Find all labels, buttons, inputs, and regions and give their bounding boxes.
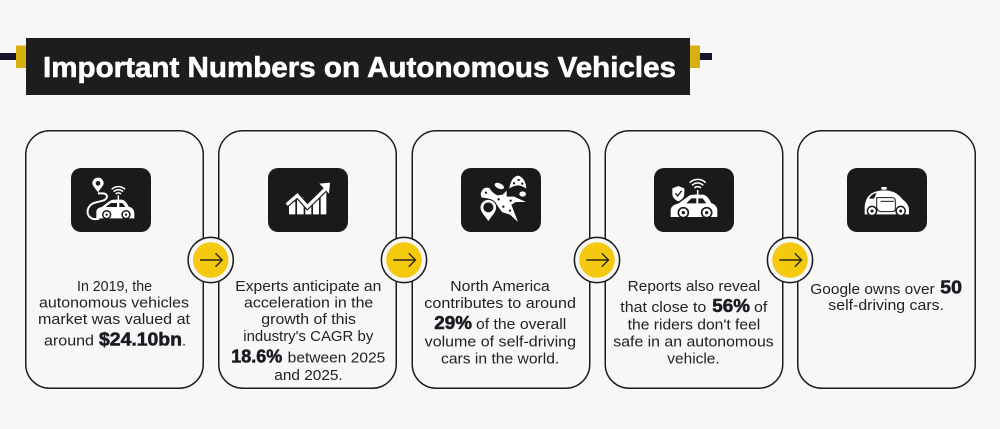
text: CAGR growth: and 2025. <box>274 368 343 384</box>
text: market value: market was valued at <box>38 312 190 328</box>
panel: Google fleet <box>798 131 975 388</box>
panel: CAGR growth <box>219 131 396 388</box>
text: CAGR growth <box>231 279 385 384</box>
title text: Important Numbers on Autonomous Vehicles <box>43 52 676 84</box>
arrow connector 1 <box>188 237 233 283</box>
arrow connector 3 <box>574 237 620 283</box>
text: North America share: cars in the world. <box>441 351 559 367</box>
text: CAGR growth: 18.6% <box>231 347 282 367</box>
text: rider safety <box>613 279 774 367</box>
text: North America share: of the overall <box>476 317 566 333</box>
icon: car with shield and signal <box>654 168 734 232</box>
arrow connector 2 <box>381 237 427 283</box>
text: rider safety: Reports also reveal <box>628 279 760 295</box>
text: CAGR growth: Experts anticipate an <box>235 279 381 295</box>
panel: market value <box>26 131 203 388</box>
text: market value: In 2019, the <box>77 279 152 295</box>
icon: connected car with location pin <box>71 168 151 232</box>
text: CAGR growth: industry's CAGR by <box>243 329 374 345</box>
text: rider safety: the riders don't feel <box>628 317 760 333</box>
text: CAGR growth: growth of this <box>261 312 356 328</box>
panel: North America share <box>412 131 590 388</box>
text: market value <box>38 279 190 350</box>
panel: rider safety <box>605 131 783 388</box>
text: North America share <box>424 279 576 367</box>
text: market value: $24.10bn <box>99 330 182 350</box>
title banner <box>0 38 712 95</box>
text: market value: around <box>44 334 94 350</box>
text: North America share: volume of self-driving <box>425 335 576 351</box>
text: rider safety: safe in an autonomous <box>613 335 774 351</box>
text: North America share: 29% <box>434 313 472 333</box>
text: market value: autonomous vehicles <box>39 296 189 312</box>
icon: self-driving pod car <box>847 168 927 232</box>
text: rider safety: of <box>754 300 768 316</box>
arrow connector 4 <box>767 237 813 283</box>
text: rider safety: that close to <box>620 300 706 316</box>
text: CAGR growth: acceleration in the <box>244 296 373 312</box>
text: market value: . <box>182 334 186 350</box>
text: Google fleet <box>810 278 962 314</box>
text: rider safety: 56% <box>712 296 750 316</box>
text: CAGR growth: between 2025 <box>288 351 385 367</box>
text: North America share: North America <box>450 279 551 295</box>
text: rider safety: vehicle. <box>667 351 720 367</box>
text: Google fleet: 50 <box>940 278 962 298</box>
icon: growth chart <box>268 168 348 232</box>
text: Google fleet: Google owns over <box>810 282 935 298</box>
icon: map with pin <box>461 168 541 232</box>
text: North America share: contributes to around <box>424 296 576 312</box>
text: Google fleet: self-driving cars. <box>828 298 944 314</box>
